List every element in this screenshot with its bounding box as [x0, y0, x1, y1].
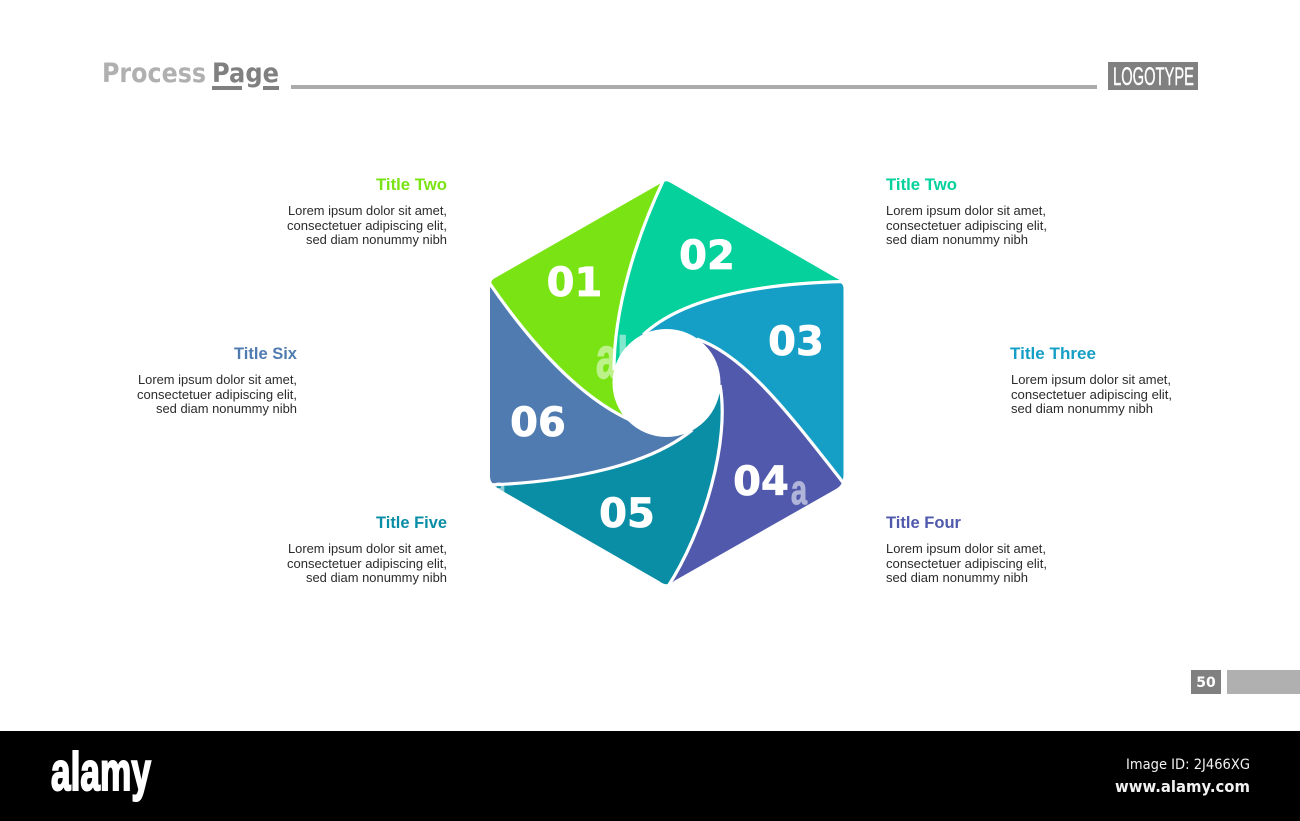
text block: top left, Title Two: sed diam nonummy nibh: [306, 232, 447, 247]
text block: left, Title Six: consectetuer adipiscing elit,: [137, 387, 297, 402]
text block: top right, Title Two: sed diam nonummy nibh: [886, 232, 1028, 247]
text block: left, Title Six: Lorem ipsum dolor sit amet,: [138, 372, 297, 387]
number 05: 05: [599, 491, 655, 537]
text block: bottom left, Title Five: sed diam nonummy nibh: [306, 570, 447, 585]
number 03: 03: [768, 319, 824, 365]
text block: bottom left, Title Five: Lorem ipsum dolor sit amet,: [288, 541, 447, 556]
watermark letters: al: [596, 326, 628, 391]
text block: right, Title Three: consectetuer adipiscing elit,: [1011, 387, 1172, 402]
text block: bottom left, Title Five: consectetuer adipiscing elit,: [287, 556, 447, 571]
segment 04: [667, 338, 842, 584]
heading: Process Page: [102, 58, 279, 90]
text block: right, Title Three: Lorem ipsum dolor sit amet,: [1011, 372, 1171, 387]
page number: [1191, 670, 1221, 694]
text block: bottom left, Title Five: Title Five: [376, 514, 447, 532]
segment 01: [491, 182, 667, 420]
centre hole: [612, 329, 720, 437]
text block: top right, Title Two: [886, 176, 1047, 247]
header rule: [291, 85, 1097, 89]
segment separators: [488, 179, 846, 588]
logotype badge: [1108, 62, 1198, 91]
text block: top right, Title Two: consectetuer adipiscing elit,: [886, 218, 1047, 233]
page number: 50: [1196, 675, 1216, 691]
number 06: 06: [510, 400, 566, 446]
text block: left, Title Six: sed diam nonummy nibh: [156, 401, 297, 416]
number 01: 01: [547, 260, 602, 306]
text block: right, Title Three: sed diam nonummy nibh: [1011, 401, 1153, 416]
text block: bottom right, Title Four: [886, 514, 1047, 585]
watermark letters: a: [791, 466, 807, 513]
hexagon spiral diagram: [488, 179, 846, 588]
text block: top right, Title Two: Title Two: [886, 176, 957, 194]
text block: top left, Title Two: Title Two: [376, 176, 447, 194]
text block: left, Title Six: [137, 345, 298, 416]
number 04: 04: [733, 459, 789, 505]
segment 06: [490, 284, 694, 485]
text block: bottom left, Title Five: [287, 514, 447, 585]
number 02: 02: [679, 233, 735, 279]
text block: bottom right, Title Four: consectetuer adipiscing elit,: [886, 556, 1047, 571]
watermark letters: [492, 326, 807, 513]
logotype badge: LOGOTYPE: [1113, 63, 1194, 91]
text block: bottom right, Title Four: Lorem ipsum dolor sit amet,: [886, 541, 1046, 556]
image id: Image ID: 2J466XG: [1126, 757, 1250, 773]
website: www.alamy.com: [1115, 777, 1250, 796]
heading: Process Page: Process: [102, 58, 206, 89]
text block: top left, Title Two: [287, 176, 447, 247]
text block: bottom right, Title Four: Title Four: [886, 514, 962, 532]
heading: Process Page: Page: [212, 58, 279, 89]
watermark letters: a: [492, 472, 506, 503]
segment 02: [614, 181, 843, 383]
text block: bottom right, Title Four: sed diam nonummy nibh: [886, 570, 1028, 585]
segment 03: [640, 282, 844, 482]
alamy logo: alamy: [51, 742, 151, 802]
segment 05: [492, 383, 722, 584]
text block: top left, Title Two: consectetuer adipiscing elit,: [287, 218, 447, 233]
text block: right, Title Three: Title Three: [1010, 345, 1096, 363]
footer band: [0, 731, 1300, 821]
page number bar: [1227, 670, 1300, 694]
text block: left, Title Six: Title Six: [234, 345, 298, 363]
text block: top right, Title Two: Lorem ipsum dolor sit amet,: [886, 203, 1046, 218]
text block: right, Title Three: [1010, 345, 1172, 416]
text block: top left, Title Two: Lorem ipsum dolor sit amet,: [288, 203, 447, 218]
